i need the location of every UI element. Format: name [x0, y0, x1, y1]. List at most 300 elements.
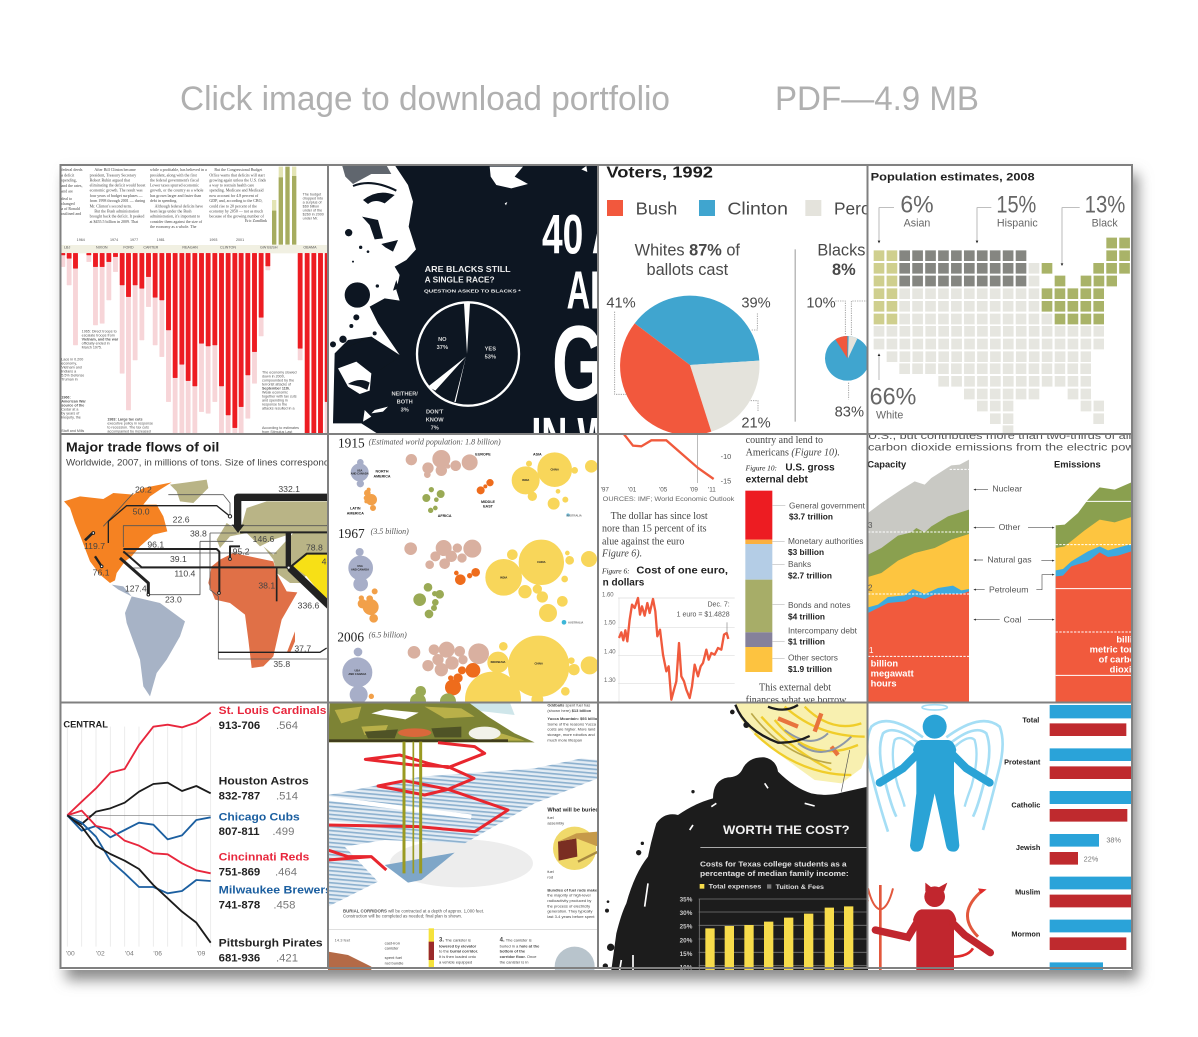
text: dollar paragraph: nore than 15 percent of its: [602, 524, 707, 535]
bar chart: religion: 38%: [1106, 836, 1121, 845]
region labels: AMERICA: [347, 512, 364, 516]
year headings: 1967: [338, 526, 365, 541]
text: closing paragraph: [746, 683, 847, 706]
text: dollar paragraph: The dollar has since lost: [611, 511, 708, 522]
positive surplus bars: [272, 167, 296, 245]
region labels: ASIA: [533, 453, 542, 457]
chart annotations: 1993: [209, 238, 217, 242]
region labels: USA: [355, 669, 360, 673]
article text columns: brought back the deficit. It peaked: [90, 214, 144, 219]
labels and arrows: 15%: [996, 191, 1036, 218]
text: right column intro: Americans (Figure 10).: [746, 448, 840, 459]
chart annotations: Weak economic: [262, 390, 288, 394]
region labels: AFRICA: [438, 514, 452, 518]
series labels with arrows: Coal: [1004, 614, 1022, 624]
team labels: Pittsburgh Pirates: [219, 937, 323, 949]
chart annotations: Laos in 0.200: [61, 357, 83, 361]
chart: projected balance: '11: [708, 486, 716, 493]
chart: projected balance: [601, 433, 735, 503]
chart annotations: GW BUSH: [260, 246, 278, 250]
text: blacks share: [818, 244, 865, 275]
year headings: 2006: [337, 629, 364, 644]
chart annotations: accompanied by increased: [107, 430, 151, 434]
chart annotations: OBAMA: [303, 246, 317, 250]
team labels: .421: [276, 952, 298, 964]
bar chart: costs: 35%: [680, 897, 693, 904]
region labels: CHINA: [550, 467, 559, 471]
poster headline: 40 A / AL / G / IN W: [534, 214, 597, 433]
flow values: 96.1: [147, 539, 164, 549]
article text columns: could rise to 20 percent of the: [209, 203, 257, 208]
region labels: NORTH: [375, 469, 389, 473]
region labels: INDIA: [500, 575, 507, 579]
chart annotations: down in 2000,: [262, 374, 285, 378]
panel: capacity and emissions areas: [867, 431, 1144, 703]
poster headline: 40 A / AL / G / IN W: IN W: [531, 408, 612, 467]
article text columns: outlined and: [61, 211, 81, 216]
heading: central: CENTRAL: [63, 720, 108, 730]
area chart: emissions: metric tons: [1090, 644, 1140, 654]
line chart: cost of one euro: 1.30: [604, 678, 616, 684]
heading: emissions: Emissions: [1054, 459, 1101, 469]
sidebar text: radioactivity produced by: [547, 898, 591, 903]
pie chart: whites: 21%: [741, 416, 771, 432]
world map: [64, 480, 330, 696]
step text: 3 and 4: to the burial corridor.: [439, 949, 478, 954]
article text columns: president, Treasury Secretary: [90, 172, 136, 178]
series labels with arrows: Nuclear: [992, 484, 1022, 494]
text: blacks share: 8%: [832, 261, 856, 279]
labels and arrows: [870, 191, 1125, 421]
sidebar text: [547, 703, 600, 919]
sidebar text: the majority of high-level: [547, 893, 591, 898]
bar chart: costs: 30%: [680, 910, 693, 917]
article text columns: spending. Medicare and Medicaid: [209, 188, 264, 193]
line chart: cost of one euro: 1.50: [604, 621, 616, 627]
sidebar text: fuel: [547, 815, 554, 820]
article text columns: consider them against the size of: [150, 219, 203, 224]
intro text: U.S., but contributes more than two-thirds of all: [868, 431, 1131, 442]
chart annotations: by years of: [61, 412, 80, 416]
sidebar text: the process of electricity: [547, 903, 590, 908]
chart annotations: 1964: [77, 238, 85, 242]
pie chart: blacks: [808, 298, 866, 416]
chart annotations: REAGAN: [182, 246, 198, 250]
bar chart: costs: 10%: [680, 964, 693, 971]
chart annotations: compounded by the: [262, 378, 294, 382]
team labels: .514: [276, 790, 298, 802]
team labels: Chicago Cubs: [219, 812, 300, 824]
region labels: LATIN: [350, 507, 361, 511]
pie chart: blacks: 10%: [806, 295, 836, 311]
portfolio grid of twelve panels: [60, 164, 1144, 987]
year axis: '04: [125, 950, 134, 957]
team labels: Cincinnati Reds: [219, 852, 309, 864]
chart annotations: inequity, the: [61, 416, 81, 420]
article text columns: the federal government's fiscal: [150, 177, 200, 182]
region labels: [347, 453, 583, 676]
region labels: CHINA: [534, 662, 543, 666]
team labels: 832-787: [219, 790, 260, 802]
chart annotations: response to the: [262, 402, 287, 406]
heading: population estimates: Population estimates, 2008: [871, 172, 1035, 184]
bubbles: 1915: [351, 451, 597, 517]
sidebar text: rod: [547, 874, 553, 879]
chart annotations: CLINTON: [220, 246, 236, 250]
oil flow lines: [85, 493, 330, 659]
chart annotations: March 1975.: [82, 345, 102, 349]
text: closing paragraph: This external debt: [759, 683, 831, 694]
year axis: '00: [66, 950, 75, 957]
team labels: .458: [273, 900, 295, 912]
bubbles: 2006: [342, 636, 597, 702]
sidebar text: fuel: [547, 869, 554, 874]
flow values: 146.6: [253, 534, 275, 544]
heading: figure 6: [602, 566, 728, 586]
heading: capacity: Capacity: [867, 459, 907, 469]
pie chart: single race answers: DON'T: [426, 409, 444, 415]
chart: projected balance: -15: [721, 477, 731, 486]
region labels: USA: [357, 468, 363, 472]
article text columns: and the rates,: [61, 183, 82, 189]
pie chart: single race answers: BOTH: [397, 399, 413, 405]
illustration: halftone faces: [328, 165, 587, 435]
illustration: ink blot: [603, 757, 868, 970]
illustration: scribbled sun: [730, 702, 868, 792]
chart: projected balance: '05: [659, 486, 668, 493]
bar chart: costs: 15%: [680, 951, 693, 958]
article text columns: president, along with the first: [150, 172, 198, 178]
year axis: [66, 950, 206, 957]
team labels: Houston Astros: [219, 776, 309, 788]
article text columns: a of Ronald: [61, 206, 80, 211]
flow values: 76.1: [93, 568, 110, 578]
article text columns: now account for 4.8 percent of: [209, 193, 259, 198]
bar chart: religion: Catholic: [1011, 801, 1040, 810]
step text: 3 and 4: 3. The canister is: [439, 938, 471, 944]
sidebar text: Yucca Mountain: $93 billion: [547, 716, 600, 721]
sidebar text: much more lifespan: [547, 737, 582, 742]
legend: Tuition & Fees: [776, 884, 824, 891]
flow values: 95.2: [233, 547, 250, 557]
heading: figure 6: Cost of one euro,: [636, 566, 728, 577]
bar chart: costs: 20%: [680, 938, 693, 945]
stacked bar: external debt: $2.7 trillion: [788, 570, 832, 580]
chart annotations: from Stimulus Last: [262, 430, 292, 434]
labels and arrows: Asian: [904, 218, 930, 230]
year headings: (6.5 billion): [369, 630, 407, 639]
text: whites share: ballots cast: [646, 261, 729, 279]
icon: devil: [865, 883, 990, 970]
text: right column intro: [746, 435, 840, 459]
bar chart: religion: 22%: [1084, 854, 1099, 863]
article text columns: growing again unless the U.S. finds: [209, 177, 267, 182]
chart annotations: source of the: [61, 404, 84, 408]
chart annotations: Vietnam, and the war: [82, 337, 119, 341]
chart: projected balance: -10: [721, 452, 731, 461]
text: closing paragraph: finances what we borrow: [746, 695, 847, 706]
bar chart: costs: 25%: [680, 923, 693, 930]
chart annotations: $69 billion: [303, 205, 319, 209]
region labels: AND CANADA: [351, 472, 369, 476]
step text: 3 and 4: the canister is in: [500, 959, 528, 964]
article text columns: federal deeds: [61, 167, 83, 172]
pie chart: single race answers: 37%: [437, 345, 448, 351]
flow values: 35.8: [273, 659, 290, 669]
chart: projected balance: '97: [601, 486, 609, 493]
area chart: capacity: 1: [869, 646, 874, 655]
panel: major trade flows of oil: [60, 433, 331, 703]
article text columns: Robert Rubin argued that: [90, 177, 131, 182]
chart annotations: American War: [61, 400, 86, 404]
panel: population estimates map: [868, 165, 1132, 435]
series labels with arrows: Other: [999, 522, 1020, 532]
team labels: 913-706: [219, 720, 260, 732]
article text columns: the economy as a whole. The: [150, 224, 197, 229]
flow values: [84, 484, 331, 669]
step text: 3 and 4: corridor floor. Once: [500, 954, 537, 959]
heading: pie title: [424, 264, 521, 294]
sidebar text: Oddballs spent fuel has: [547, 703, 590, 708]
series labels with arrows: Petroleum: [989, 584, 1028, 594]
sidebar text: assembly: [547, 820, 564, 825]
text: dollar paragraph: Figure 6).: [601, 548, 642, 559]
flow values: 127.4: [125, 584, 147, 594]
heading: figure 10: external debt: [746, 474, 808, 485]
stacked bar: external debt: Other sectors: [788, 653, 838, 663]
region labels: INDONESIA: [491, 660, 505, 664]
subtitle: Worldwide, 2007, in millions of tons. Size of lines correspond: [66, 458, 329, 468]
article text columns: been large under the Bush: [150, 209, 192, 214]
deficit bars: [61, 253, 329, 435]
area chart: emissions: [1056, 482, 1144, 703]
article text columns: But the Congressional Budget: [214, 167, 263, 172]
sidebar text: Some of the reasons Yucca: [547, 721, 597, 726]
sidebar text: storage, more robotics and: [547, 732, 595, 737]
article text columns: economic growth. The result was: [90, 188, 143, 193]
article text columns: four years of budget surpluses —: [90, 193, 144, 198]
chart annotations: [61, 193, 324, 434]
area chart: capacity: 2: [868, 583, 873, 592]
pie chart: single race answers: KNOW: [426, 417, 444, 423]
year headings: [337, 436, 501, 644]
chart annotations: Staff and Mills: [61, 429, 84, 433]
text: whites share: Whites 87% of: [635, 242, 740, 260]
series labels with arrows: [973, 484, 1055, 624]
region labels: AMERICA: [373, 474, 391, 478]
bar chart: religion: Total: [1022, 716, 1039, 725]
team labels: 741-878: [219, 900, 260, 912]
region labels: INDIA: [522, 478, 529, 482]
sidebar text: last 3-4 years before spent: [547, 914, 595, 919]
labels and arrows: 6%: [900, 191, 934, 218]
illustration: red tunnels and shafts: [328, 742, 508, 873]
flow values: 20.2: [135, 484, 152, 494]
region labels: AUSTRALIA: [568, 621, 583, 625]
caption: burial corridors: [343, 908, 484, 919]
illustration: mountain surface: [328, 702, 535, 742]
area chart: emissions: billion: [1116, 634, 1144, 644]
pie chart: whites: [606, 295, 771, 435]
stacked bar: external debt: Monetary authorities: [788, 536, 863, 546]
heading: pie title: ARE BLACKS STILL: [425, 264, 511, 274]
chart annotations: 2001: [236, 238, 244, 242]
intro text: [868, 431, 1135, 453]
flow values: 22.6: [173, 514, 190, 524]
team labels: .499: [272, 826, 294, 838]
chart annotations: under Mr.: [303, 217, 318, 221]
article text columns: growth, or the country as a whole: [150, 188, 204, 194]
flow values: 50.0: [133, 507, 150, 517]
heading: pie title: A SINGLE RACE?: [425, 275, 495, 285]
chart annotations: 1966:: [61, 396, 71, 400]
chart annotations: $260 in 2000: [303, 213, 324, 217]
bubbles: 1967: [349, 540, 596, 625]
legend: Total expenses: [709, 883, 762, 890]
bar chart: religion: Mormon: [1011, 930, 1041, 939]
flow values: 38.1: [258, 581, 275, 591]
pie chart: single race answers: 3%: [401, 407, 409, 413]
heading: figure 6: Figure 6:: [601, 567, 630, 576]
heading: figure 10: [745, 463, 835, 485]
step text: 3 and 4: bottom of the: [500, 949, 526, 954]
heading: voters: Voters, 1992: [606, 164, 713, 181]
chart: projected balance: '01: [628, 486, 637, 493]
area chart: capacity: billion: [871, 658, 898, 668]
chart annotations: 1977: [130, 238, 138, 242]
area chart: capacity: megawatt: [871, 668, 914, 678]
chart: projected balance: '09: [690, 486, 698, 493]
pie chart: single race answers: [391, 302, 519, 431]
step text: 3 and 4: canister: [385, 946, 399, 951]
chart subtitle: [700, 860, 849, 878]
year headings: 1915: [338, 436, 365, 451]
chart annotations: Cedar at a: [61, 408, 79, 412]
line chart: team records: [67, 713, 211, 947]
chart annotations: and spending in: [262, 398, 288, 402]
intro text: carbon dioxide emissions from the electric pow: [868, 442, 1135, 453]
year axis: '02: [96, 950, 105, 957]
line chart: cost of one euro: 1.40: [604, 650, 616, 656]
step text: 3 and 4: 14.3 feet: [335, 938, 351, 943]
chart annotations: Vietnam and: [61, 365, 82, 369]
pie chart: whites: 39%: [741, 295, 771, 311]
year headings: (Estimated world population: 1.8 billion): [369, 438, 501, 447]
labels and arrows: 13%: [1085, 191, 1125, 218]
team labels: 681-936: [219, 952, 260, 964]
chart annotations: Truman in: [61, 377, 78, 381]
chart annotations: 1981: [157, 238, 165, 242]
illustration: burial corridor grid: [328, 758, 598, 907]
stacked bar: external debt: $3 billion: [788, 547, 824, 557]
line chart: cost of one euro: Dec. 7:: [708, 601, 730, 608]
heading: pdf size: PDF—4.9 MB: [775, 80, 979, 118]
icon: fuel assembly: [553, 827, 598, 870]
chart annotations: dropped into: [303, 197, 323, 201]
chart annotations: LBJ: [64, 246, 70, 250]
legend: Perot: [834, 198, 876, 218]
article text columns: Mr. Clinton's second term.: [90, 203, 132, 208]
area chart: emissions: dioxide: [1110, 664, 1142, 674]
chart annotations: executive policy in response: [107, 422, 153, 426]
region labels: EUROPE: [475, 453, 491, 457]
article text columns: Lower taxes spurred economic: [150, 183, 199, 188]
stacked bar: external debt: Banks: [788, 559, 811, 569]
article text columns: from 1998 through 2001 — during: [90, 198, 145, 203]
chart annotations: September 11th.: [262, 386, 290, 390]
pie chart: single race answers: 7%: [431, 425, 439, 431]
legend: Bush: [636, 198, 677, 218]
region labels: CHINA: [537, 560, 546, 564]
step text: 3 and 4: 4. The canister is: [500, 938, 532, 944]
sidebar text: (shown here) $13 billion: [547, 708, 592, 713]
pie chart: single race answers: YES: [485, 347, 496, 353]
article text columns: [61, 167, 267, 229]
year headings: (3.5 billion): [371, 527, 409, 536]
flow values: 37.7: [294, 643, 311, 653]
caption: burial corridors: BURIAL CORRIDORS will be contracted at a depth of approx. 1,000 feet.: [343, 908, 484, 913]
stacked bar: external debt: General government: [789, 500, 866, 510]
article text columns: deal to: [61, 196, 72, 201]
bar chart: religion: Jewish: [1016, 843, 1041, 852]
step text: 3 and 4: buried in a hole at the: [500, 943, 540, 948]
year axis: '06: [153, 950, 162, 957]
line chart: cost of one euro: 1.60: [602, 592, 614, 598]
flow values: 23.0: [165, 594, 182, 604]
bar chart: religion: Protestant: [1004, 757, 1041, 766]
legend: [607, 200, 866, 216]
panel: worth the cost: [598, 700, 868, 971]
article text columns: GDP, and, according to the CBO,: [209, 198, 262, 204]
panel: central division lines: [60, 700, 332, 970]
article text columns: has grown larger and faster than: [150, 193, 201, 198]
chart annotations: The budget: [303, 193, 321, 197]
step text: 3 and 4: cast-iron: [385, 940, 400, 945]
region labels: AND CANADA: [351, 567, 369, 571]
chart annotations: FORD: [123, 246, 134, 250]
frame grid lines: [60, 165, 1132, 968]
sidebar text: costs are higher. More land: [547, 727, 595, 732]
stacked bar: external debt: $1.9 trillion: [788, 664, 832, 674]
year axis: '09: [197, 950, 206, 957]
chart annotations: CARTER: [143, 246, 159, 250]
team labels: St. Louis Cardinals: [219, 705, 326, 717]
heading: trade flows: Major trade flows of oil: [66, 439, 219, 454]
line chart: cost of one euro: [602, 592, 735, 703]
text: blacks share: Blacks: [817, 242, 865, 260]
stacked bar: external debt: Intercompany debt: [788, 625, 858, 635]
article text columns: while a profitable, has believed in a: [150, 167, 207, 173]
sidebar text: What will be buried: [547, 808, 599, 814]
stacked bar: external debt: $1 trillion: [788, 636, 825, 646]
chart annotations: to recession. The tax cuts: [107, 426, 149, 430]
illustration: canister: [328, 952, 371, 970]
chart subtitle: Costs for Texas college students as a: [700, 860, 847, 869]
text: dollar paragraph: alue against the euro: [602, 536, 684, 547]
article text columns: Although federal deficits have: [155, 203, 203, 208]
poster headline: 40 A / AL / G / IN W: G: [552, 303, 605, 423]
step text: 3 and 4: lowered by elevator: [439, 943, 477, 948]
bar chart: religion: [1004, 705, 1133, 971]
panel: angels and devils: [865, 700, 1133, 971]
panel: yucca mountain cutaway: [328, 700, 600, 987]
article text columns: After Bill Clinton became: [94, 167, 136, 172]
pie chart: single race answers: NO: [438, 337, 447, 343]
flow values: 332.1: [278, 484, 300, 494]
step text: 3 and 4: a vehicle equipped: [439, 959, 472, 964]
legend: Clinton: [727, 198, 788, 218]
flow values: 119.7: [84, 541, 105, 551]
